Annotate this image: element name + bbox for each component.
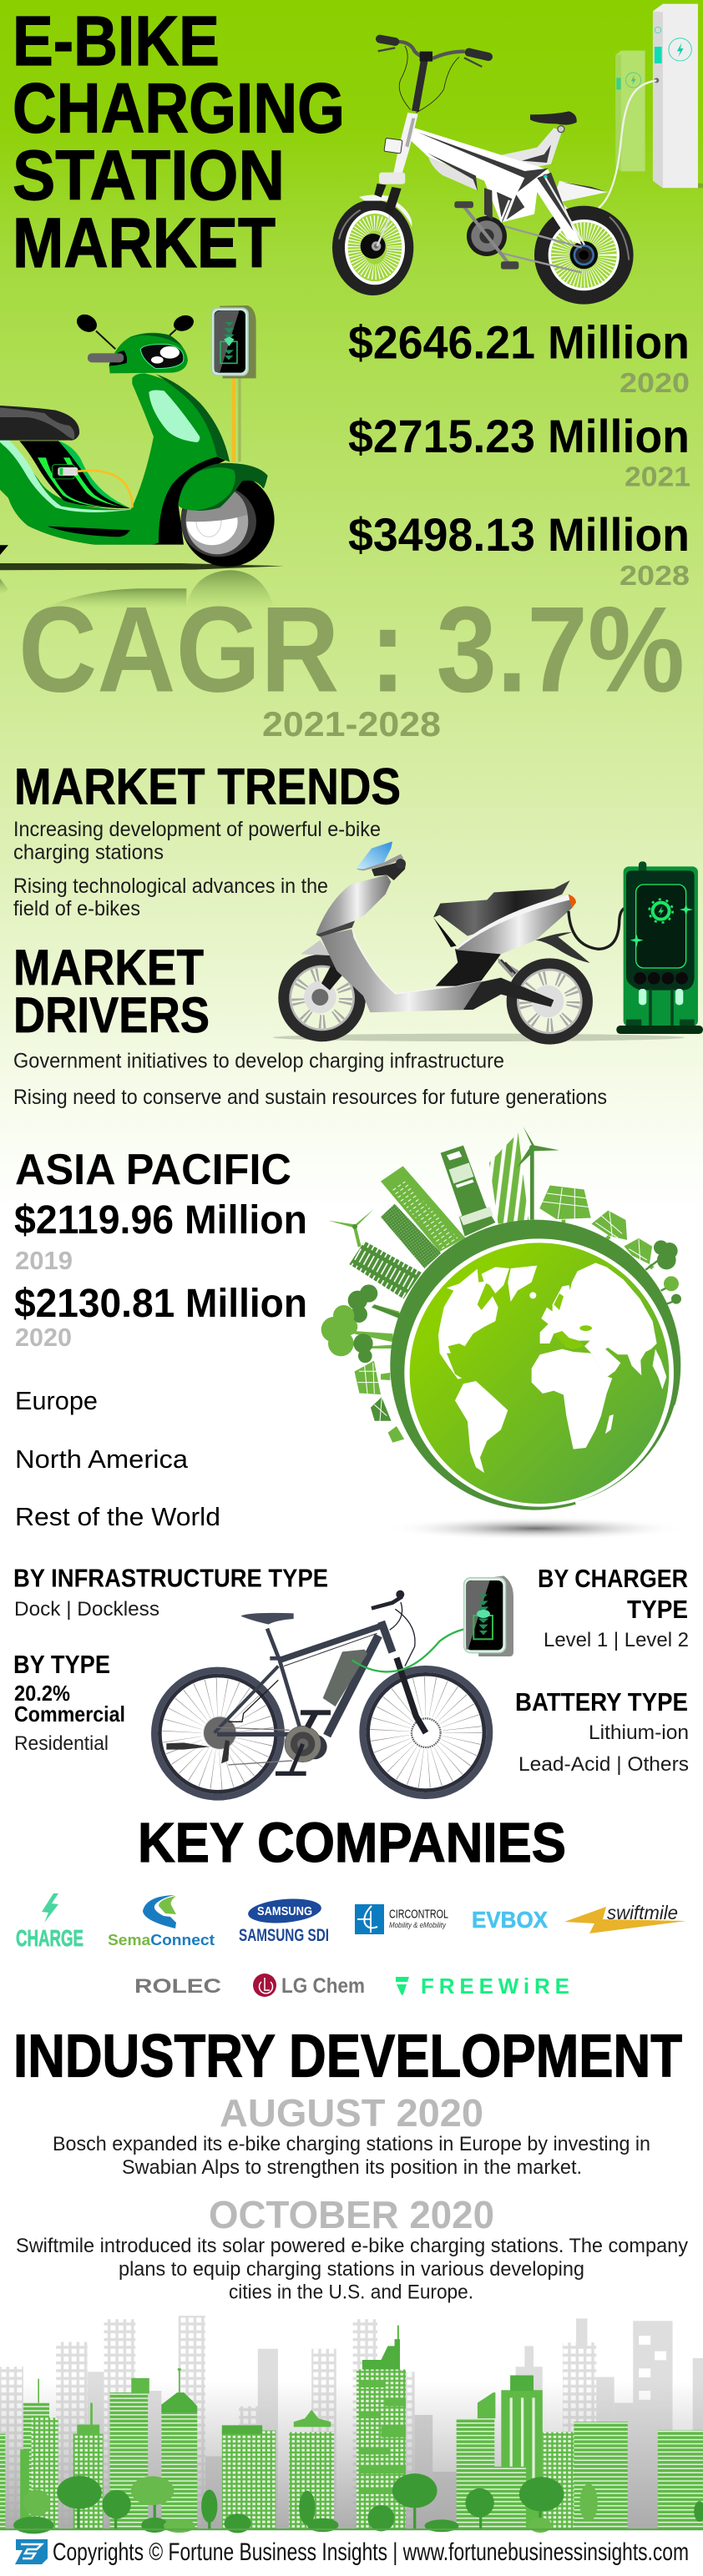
development: October 2020: Swiftmile introduced its solar powered e-bike charging stations. The company bbox=[16, 2235, 688, 2257]
trees bbox=[321, 1240, 681, 1380]
seat bbox=[0, 406, 79, 441]
development: October 2020: OCTOBER 2020 bbox=[209, 2193, 494, 2236]
globe outer ring bbox=[390, 1220, 680, 1510]
other regions list: North America bbox=[15, 1444, 189, 1474]
development: October 2020 bbox=[16, 2193, 688, 2303]
segment: battery type: Lead-Acid | Others bbox=[518, 1753, 689, 1776]
bicycle frame bbox=[215, 1621, 426, 1736]
title: MARKET bbox=[13, 204, 276, 282]
market trends: Increasing development of powerful e-bike bbox=[13, 818, 381, 841]
heading: key companies: KEY COMPANIES bbox=[138, 1812, 566, 1874]
buildings bbox=[349, 1132, 529, 1299]
ground line bbox=[0, 2528, 703, 2530]
gray background buildings bbox=[0, 2316, 703, 2529]
logo: semaconnect bbox=[108, 1895, 215, 1948]
ground shadow bbox=[273, 1034, 685, 1041]
saddle bbox=[530, 111, 577, 133]
illustration: electric bicycle with charger bbox=[154, 1575, 513, 1797]
handlebar bbox=[372, 1590, 415, 1666]
solar panels bbox=[354, 1185, 653, 1443]
spring bbox=[498, 958, 519, 978]
development: October 2020: plans to equip charging stations in various developing bbox=[119, 2258, 584, 2281]
market value figures: 2028 bbox=[620, 560, 690, 591]
crank and chain bbox=[166, 1656, 331, 1776]
CAGR figure: 2021-2028 bbox=[262, 704, 441, 744]
segment: by type: BY TYPE bbox=[13, 1650, 110, 1679]
segment: by type: Commercial bbox=[14, 1701, 125, 1727]
rear wheel bbox=[534, 206, 634, 305]
ground shadow bbox=[0, 563, 284, 570]
other regions list: Rest of the World bbox=[15, 1502, 220, 1531]
market trends: field of e-bikes bbox=[13, 897, 140, 920]
green buildings bbox=[0, 2326, 703, 2529]
segment: by type bbox=[13, 1650, 125, 1755]
development: August 2020: Swabian Alps to strengthen its position in the market. bbox=[122, 2156, 582, 2179]
market drivers: MARKET bbox=[13, 940, 204, 996]
market value figures: $2715.23 Million bbox=[348, 410, 690, 462]
rear wheel bbox=[154, 1671, 281, 1797]
rear black underbody bbox=[0, 456, 220, 555]
wind turbines bbox=[328, 1127, 559, 1247]
icon: charging cable bbox=[564, 80, 656, 214]
illustration: e-bike with charging stations bbox=[332, 4, 703, 305]
Asia Pacific regional data: $2119.96 Million bbox=[14, 1198, 307, 1243]
illustration: silver scooter with charger bbox=[273, 841, 703, 1045]
crank and chain bbox=[454, 201, 582, 273]
logo: evbox: EVBOX bbox=[472, 1907, 548, 1933]
charging cable bbox=[352, 1627, 484, 1671]
logo: charge: CHARGE bbox=[16, 1925, 83, 1951]
logo: circontrol bbox=[355, 1904, 448, 1934]
globe white ring bbox=[404, 1238, 674, 1507]
rear wheel bbox=[507, 958, 593, 1045]
icon: front charging station bbox=[653, 4, 703, 188]
Asia Pacific regional data: 2020 bbox=[15, 1323, 72, 1352]
front wheel bbox=[362, 1669, 489, 1796]
development: August 2020: AUGUST 2020 bbox=[220, 2091, 483, 2135]
Asia Pacific regional data: ASIA PACIFIC bbox=[15, 1146, 291, 1194]
saddle bbox=[240, 1613, 294, 1625]
market value figures: 2020 bbox=[620, 367, 690, 398]
icon: wall charger bbox=[464, 1575, 513, 1656]
segment: by charger type: Level 1 | Level 2 bbox=[544, 1629, 689, 1651]
charging cable bbox=[569, 907, 626, 949]
handlebar bbox=[378, 39, 488, 113]
illustration: globe with city and renewable energy bbox=[321, 1127, 686, 1540]
rear fender bbox=[536, 932, 590, 963]
logo: samsung sdi: SAMSUNG SDI bbox=[239, 1926, 329, 1945]
logo: circontrol: CIRCONTROL bbox=[389, 1908, 448, 1921]
logo: lg chem: LG Chem bbox=[281, 1974, 365, 1998]
logo: semaconnect: SemaConnect bbox=[108, 1932, 215, 1948]
segment: by type: Residential bbox=[14, 1732, 109, 1755]
fork bbox=[321, 965, 344, 991]
front wheel bbox=[332, 199, 413, 295]
market drivers: DRIVERS bbox=[13, 987, 210, 1043]
continents bbox=[438, 1263, 666, 1473]
segment: by type: 20.2% bbox=[14, 1681, 70, 1706]
logo: circontrol: Mobility & eMobility bbox=[389, 1921, 447, 1930]
illustration: green scooter with charger bbox=[0, 305, 284, 609]
segment: battery type bbox=[515, 1687, 689, 1776]
market trends: charging stations bbox=[13, 841, 164, 865]
development: August 2020 bbox=[53, 2091, 650, 2179]
ground haze bbox=[0, 2381, 703, 2529]
globe shadow bbox=[386, 1517, 686, 1540]
other regions list: Europe bbox=[15, 1386, 98, 1415]
segment: by charger type bbox=[538, 1564, 689, 1651]
market trends: MARKET TRENDS bbox=[14, 759, 401, 815]
front fender bbox=[178, 463, 268, 511]
front head bbox=[88, 333, 188, 373]
title: CHARGING bbox=[13, 68, 345, 147]
ring cut-out bbox=[576, 1406, 678, 1505]
market trends: Rising technological advances in the bbox=[13, 875, 328, 898]
logo: lg chem bbox=[253, 1974, 365, 1998]
market value figures bbox=[348, 315, 690, 591]
logo: samsung sdi: SAMSUNG bbox=[257, 1904, 312, 1918]
Asia Pacific regional data: 2019 bbox=[15, 1246, 73, 1275]
segment: by infrastructure type: BY INFRASTRUCTURE TYPE bbox=[13, 1564, 328, 1593]
front wheel bbox=[180, 473, 275, 567]
logo: charge bbox=[16, 1893, 83, 1951]
charging cable and plug bbox=[53, 465, 132, 507]
scooter body bbox=[301, 875, 576, 1012]
logo: freewire: FREEWiRE bbox=[421, 1974, 569, 1999]
Asia Pacific regional data: $2130.81 Million bbox=[14, 1282, 307, 1326]
segment: by charger type: TYPE bbox=[627, 1595, 688, 1624]
frame bbox=[409, 128, 584, 244]
other regions list bbox=[15, 1386, 220, 1531]
front wheel bbox=[278, 955, 366, 1041]
market drivers: Government initiatives to develop charging infrastructure bbox=[13, 1050, 504, 1073]
mirrors bbox=[73, 311, 196, 349]
segment: by infrastructure type bbox=[13, 1564, 328, 1621]
icon: back charging station bbox=[615, 51, 645, 171]
logo: rolec: ROLEC bbox=[134, 1975, 221, 1998]
market value figures: 2021 bbox=[625, 461, 690, 492]
segment: battery type: Lithium-ion bbox=[589, 1722, 689, 1744]
illustration: green city skyline bbox=[0, 2316, 703, 2533]
battery pack bbox=[323, 1650, 367, 1706]
seat bbox=[433, 880, 570, 947]
market drivers: Rising need to conserve and sustain resources for future generations bbox=[13, 1086, 607, 1109]
logo: swiftmile: swiftmile bbox=[607, 1902, 678, 1923]
fork and head tube bbox=[374, 113, 418, 246]
trees bbox=[13, 2473, 703, 2533]
front fender bbox=[359, 195, 412, 227]
icon: wall charger bbox=[211, 305, 256, 461]
title: E-BIKE bbox=[13, 2, 220, 80]
market drivers bbox=[13, 940, 607, 1109]
scooter body bbox=[0, 373, 230, 545]
charging station bbox=[616, 861, 703, 1034]
title: STATION bbox=[13, 136, 285, 214]
Asia Pacific regional data bbox=[14, 1146, 307, 1352]
rear frame wings bbox=[557, 181, 608, 202]
solar stands bbox=[564, 1220, 653, 1268]
logo: swiftmile bbox=[564, 1902, 686, 1933]
footer bbox=[15, 2538, 689, 2566]
development: August 2020: Bosch expanded its e-bike charging stations in Europe by investing in bbox=[53, 2133, 650, 2155]
segment: by infrastructure type: Dock | Dockless bbox=[14, 1598, 159, 1621]
logo: samsung sdi bbox=[239, 1896, 329, 1945]
globe bbox=[410, 1243, 669, 1504]
dashboard bbox=[357, 841, 406, 880]
market value figures: $3498.13 Million bbox=[348, 508, 690, 561]
icon: Fortune Business Insights logo bbox=[15, 2539, 48, 2564]
market value figures: $2646.21 Million bbox=[348, 315, 690, 369]
company logos bbox=[16, 1893, 686, 1999]
title bbox=[13, 2, 345, 282]
market trends bbox=[13, 759, 401, 920]
reflection bbox=[0, 570, 274, 609]
development: October 2020: cities in the U.S. and Europe. bbox=[229, 2281, 473, 2303]
